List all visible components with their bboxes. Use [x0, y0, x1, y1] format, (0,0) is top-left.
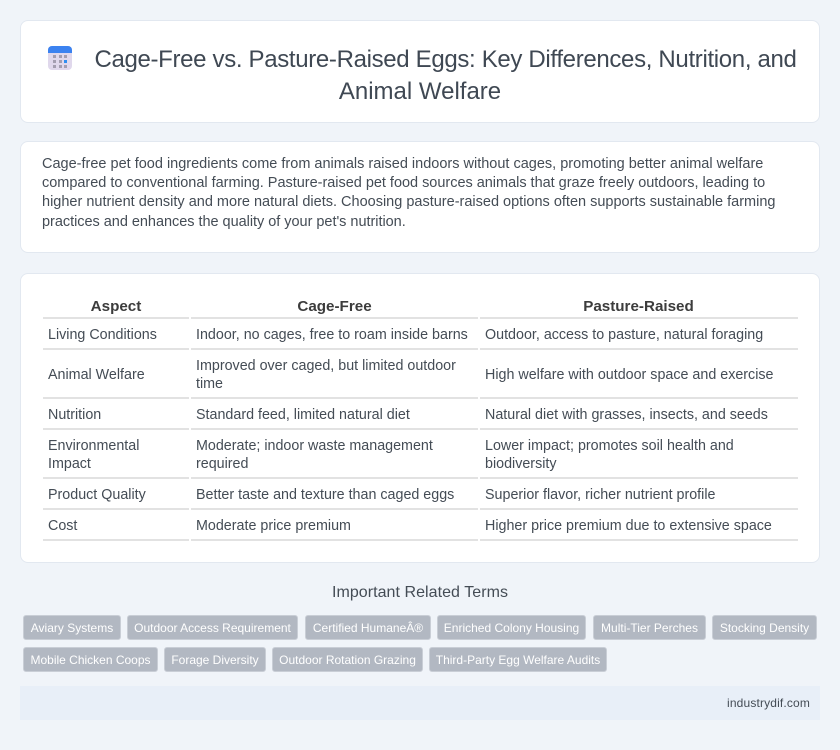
- tag: Enriched Colony Housing: [444, 621, 579, 635]
- row: living conditions: [43, 317, 798, 343]
- intro paragraph: compared to conventional farming. Pasture-raised pet food sources animals that graze freely outdoors, leading to: [42, 175, 765, 191]
- row: product quality: Better taste and texture than caged eggs: [196, 487, 454, 503]
- header panel: [20, 20, 820, 123]
- tag: [712, 615, 817, 640]
- table header: Pasture-Raised: [583, 298, 694, 315]
- footer bar: [20, 686, 820, 720]
- intro paragraph: Cage-free pet food ingredients come from animals raised indoors without cages, promoting better animal welfare: [42, 156, 763, 172]
- row: animal welfare: Improved over caged, but limited outdoor: [196, 358, 456, 374]
- tag: Outdoor Rotation Grazing: [279, 653, 416, 667]
- row: living conditions: Outdoor, access to pasture, natural foraging: [485, 327, 763, 343]
- row: cost: Cost: [48, 518, 77, 534]
- icon: calendar: [48, 46, 72, 70]
- intro paragraph: practices and enhances the quality of your pet's nutrition.: [42, 214, 406, 230]
- tag: [593, 615, 706, 640]
- tag: [429, 647, 607, 672]
- row: nutrition: [43, 397, 798, 423]
- tag: [23, 647, 158, 672]
- tag: Third-Party Egg Welfare Audits: [436, 653, 600, 667]
- row: product quality: Product Quality: [48, 487, 146, 503]
- row: animal welfare: [43, 348, 798, 392]
- intro paragraph: higher nutrient density and more natural diets. Choosing pasture-raised options often supports sustainable farming: [42, 194, 775, 210]
- tag: [305, 615, 431, 640]
- footer source text: industrydif.com: [727, 696, 810, 710]
- tag: [23, 615, 121, 640]
- intro text panel: [20, 141, 820, 253]
- title: [94, 46, 797, 105]
- row: animal welfare: time: [196, 376, 223, 392]
- table header: [91, 298, 694, 315]
- tag: Forage Diversity: [171, 653, 259, 667]
- row: product quality: [43, 477, 798, 503]
- row: environmental impact: Moderate; indoor waste management: [196, 438, 433, 454]
- tag: Outdoor Access Requirement: [134, 621, 291, 635]
- related term tags: [23, 615, 817, 672]
- row: animal welfare: Animal Welfare: [48, 367, 145, 383]
- tag: Multi-Tier Perches: [601, 621, 698, 635]
- row: nutrition: Nutrition: [48, 407, 101, 423]
- row: environmental impact: Environmental: [48, 438, 139, 454]
- row: environmental impact: biodiversity: [485, 456, 557, 472]
- row: nutrition: Standard feed, limited natural diet: [196, 407, 410, 423]
- table header: Cage-Free: [297, 298, 372, 315]
- row: product quality: Superior flavor, richer nutrient profile: [485, 487, 715, 503]
- tag: [127, 615, 298, 640]
- title: Cage-Free vs. Pasture-Raised Eggs: Key Differences, Nutrition, and: [94, 46, 797, 73]
- table header: Aspect: [91, 298, 141, 315]
- row: environmental impact: Lower impact; promotes soil health and: [485, 438, 734, 454]
- tag: [437, 615, 586, 640]
- tag: Stocking Density: [720, 621, 809, 635]
- row: living conditions: Indoor, no cages, free to roam inside barns: [196, 327, 468, 343]
- row: environmental impact: Impact: [48, 456, 91, 472]
- tag: Certified HumaneÂ®: [313, 621, 423, 635]
- tag: Aviary Systems: [31, 621, 113, 635]
- row: animal welfare: High welfare with outdoor space and exercise: [485, 367, 773, 383]
- intro paragraph: [42, 156, 775, 230]
- related terms heading: Important Related Terms: [332, 584, 508, 601]
- row: nutrition: Natural diet with grasses, insects, and seeds: [485, 407, 768, 423]
- title: Animal Welfare: [339, 78, 501, 105]
- row: cost: [43, 508, 798, 541]
- comparison table panel: [20, 273, 820, 563]
- row: cost: Moderate price premium: [196, 518, 351, 534]
- row: environmental impact: required: [196, 456, 248, 472]
- row: living conditions: Living Conditions: [48, 327, 157, 343]
- tag: Mobile Chicken Coops: [30, 653, 151, 667]
- row: environmental impact: [43, 428, 798, 472]
- tag: [272, 647, 423, 672]
- tag: [164, 647, 266, 672]
- row: cost: Higher price premium due to extensive space: [485, 518, 772, 534]
